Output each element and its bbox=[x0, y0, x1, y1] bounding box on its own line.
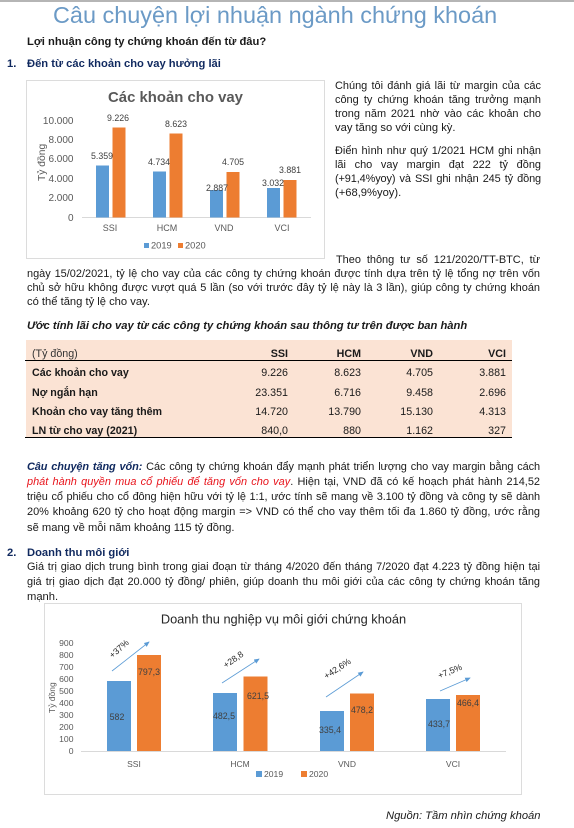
text block: brokerage revenue: Giá trị giao dịch trung bình trong giai đoạn từ tháng 4/2020 đến tháng 7/2020 đạt 4.223 tỷ đồng hiện tại bbox=[27, 561, 540, 573]
y axis labels: 700 bbox=[59, 662, 74, 672]
text block: circular 121: có thể tăng tỷ lệ cho vay. bbox=[27, 296, 150, 308]
y axis labels: 6.000 bbox=[48, 154, 74, 165]
text block: capital raising story: Câu chuyện tăng vốn: Các công ty chứng khoán đẩy mạnh phát triển lượng cho vay margin bằng cách bbox=[27, 461, 540, 473]
data labels: 797,3 bbox=[138, 667, 160, 677]
text block: brokerage revenue bbox=[27, 561, 540, 603]
text block: brokerage revenue: mạnh. bbox=[27, 591, 58, 603]
table header row: (Tỷ đồng) bbox=[32, 348, 78, 360]
data labels: 3.032 bbox=[262, 178, 284, 188]
row: additional loans: 14.720 bbox=[255, 406, 288, 418]
text block: capital raising story: 20% khoảng 620 tỷ cho hoạt động margin => VND có thể cho vay thêm tối đa 1.860 tỷ đồng, ước rằng bbox=[27, 506, 540, 518]
bars 2020 bbox=[137, 655, 480, 751]
text block: margin analysis: Điển hình như quý 1/2021 HCM ghi nhận bbox=[335, 145, 541, 157]
y axis labels: 500 bbox=[59, 686, 74, 696]
category labels bbox=[103, 223, 290, 233]
text block: capital raising story bbox=[26, 460, 540, 534]
row: profit from loans bbox=[32, 425, 506, 437]
table header row: VCI bbox=[488, 348, 506, 360]
heading: section 1: 1. bbox=[7, 58, 16, 70]
legend: 2020 bbox=[185, 240, 206, 250]
y axis labels: 8.000 bbox=[48, 135, 74, 146]
text block: margin analysis: trong năm 2021 nhờ vào các khoản cho bbox=[335, 108, 541, 120]
category labels: VND bbox=[214, 223, 234, 233]
growth arrows bbox=[112, 642, 470, 697]
data labels: 433,7 bbox=[428, 719, 450, 729]
category labels: VCI bbox=[446, 759, 460, 769]
row: profit from loans: 880 bbox=[343, 425, 361, 437]
data labels: 335,4 bbox=[319, 725, 341, 735]
text block: margin analysis: vay tăng so với cùng kỳ. bbox=[335, 122, 456, 134]
row: additional loans: Khoản cho vay tăng thêm bbox=[32, 406, 162, 418]
growth labels: +42,6% bbox=[322, 656, 353, 681]
text block: capital raising story: triệu cổ phiếu cho cổ đông hiện hữu với tỷ lệ 1:1, ước tính sẽ mang về 3.100 tỷ đồng và công ty sẽ dành bbox=[27, 490, 540, 502]
growth labels: +7,5% bbox=[436, 662, 464, 681]
row: short-term debt: 9.458 bbox=[406, 387, 433, 399]
data labels: 4.734 bbox=[148, 157, 170, 167]
row: short-term debt bbox=[32, 386, 506, 399]
data labels: 478,2 bbox=[351, 705, 373, 715]
y axis labels: 0 bbox=[69, 746, 74, 756]
y axis labels: 400 bbox=[59, 698, 74, 708]
legend: 2020 bbox=[309, 769, 328, 779]
legend bbox=[144, 240, 206, 250]
row: loans: Các khoản cho vay bbox=[32, 367, 129, 379]
data labels: 8.623 bbox=[165, 119, 187, 129]
y axis labels: 600 bbox=[59, 674, 74, 684]
source note: Nguồn: Tầm nhìn chứng khoán bbox=[386, 810, 540, 822]
y axis title: Tỷ đồng bbox=[36, 144, 48, 181]
y axis labels: 200 bbox=[59, 722, 74, 732]
table header row bbox=[32, 348, 506, 360]
y axis labels: 10.000 bbox=[43, 116, 74, 127]
table heading: Ước tính lãi cho vay từ các công ty chứng khoán sau thông tư trên được ban hành bbox=[27, 320, 467, 332]
row: loans: 4.705 bbox=[406, 367, 433, 379]
heading: section 2: Doanh thu môi giới bbox=[27, 547, 129, 559]
y axis labels: 0 bbox=[68, 213, 74, 224]
text block: circular 121 bbox=[27, 254, 540, 308]
table: loan interest estimates bbox=[26, 340, 512, 438]
title: Câu chuyện lợi nhuận ngành chứng khoán bbox=[53, 2, 497, 28]
data labels: 621,5 bbox=[247, 691, 269, 701]
subtitle question: Lợi nhuận công ty chứng khoán đến từ đâu? bbox=[27, 36, 266, 48]
category labels: SSI bbox=[103, 223, 117, 233]
chart: brokerage revenue bbox=[44, 603, 522, 795]
category labels: HCM bbox=[157, 223, 177, 233]
row: additional loans bbox=[32, 406, 506, 418]
growth labels: +37% bbox=[107, 637, 131, 660]
text block: circular 121: chủ sở hữu không được vượt quá 5 lần (so với trước đây tỷ lệ này là 3 lần), giúp công ty chứng khoán bbox=[27, 282, 540, 294]
row: additional loans: 13.790 bbox=[328, 406, 361, 418]
data labels: 4.705 bbox=[222, 157, 244, 167]
data labels: 3.881 bbox=[279, 165, 301, 175]
bars 2019 bbox=[96, 166, 280, 218]
heading: section 1: Đến từ các khoản cho vay hưởng lãi bbox=[27, 58, 221, 70]
data labels: 9.226 bbox=[107, 113, 129, 123]
y axis labels: 300 bbox=[59, 710, 74, 720]
growth labels bbox=[107, 637, 464, 681]
chart title: Doanh thu nghiệp vụ môi giới chứng khoán bbox=[161, 612, 406, 626]
y axis labels: 900 bbox=[59, 638, 74, 648]
legend: 2019 bbox=[151, 240, 172, 250]
data labels bbox=[110, 667, 479, 735]
legend bbox=[256, 769, 328, 779]
data labels: 5.359 bbox=[91, 151, 113, 161]
row: profit from loans: 327 bbox=[488, 425, 506, 437]
category labels: HCM bbox=[230, 759, 250, 769]
data labels: 2.887 bbox=[206, 183, 228, 193]
bars 2020 bbox=[112, 128, 296, 218]
legend: 2019 bbox=[264, 769, 283, 779]
growth labels: +28,8 bbox=[221, 649, 245, 670]
y axis title: Tỷ đồng bbox=[47, 682, 57, 713]
text block: circular 121: ngày 15/02/2021, tỷ lệ cho vay của các công ty chứng khoán được tính dựa trên tỷ lệ tổng nợ trên vốn bbox=[27, 268, 540, 280]
row: loans: 9.226 bbox=[261, 367, 288, 379]
row: short-term debt: 23.351 bbox=[255, 387, 288, 399]
table header row: HCM bbox=[337, 348, 361, 360]
table header row: SSI bbox=[271, 348, 288, 360]
text block: margin analysis: công ty chứng khoán tăng trưởng mạnh bbox=[335, 94, 541, 106]
y axis labels bbox=[43, 116, 74, 224]
text block: margin analysis bbox=[335, 80, 541, 199]
category labels: VCI bbox=[274, 223, 290, 233]
text block: margin analysis: (+68,9%yoy). bbox=[335, 187, 401, 199]
row: additional loans: 15.130 bbox=[400, 406, 433, 418]
data labels bbox=[91, 113, 301, 193]
y axis labels: 800 bbox=[59, 650, 74, 660]
text block: capital raising story: phát hành quyền mua cổ phiếu để tăng vốn cho vay. Hiện tại, VND đã có kế hoạch phát hành 214,52 bbox=[27, 476, 540, 488]
text block: capital raising story: sẽ mang về mỗi năm khoảng 115 tỷ đồng. bbox=[27, 522, 235, 534]
text block: brokerage revenue: giá trị giao dịch đạt 20.000 tỷ đồng/ phiên, giúp doanh thu môi giới của các công ty chứng khoán tăng bbox=[27, 576, 540, 588]
chart title: Các khoản cho vay bbox=[108, 90, 244, 106]
y axis labels: 2.000 bbox=[48, 193, 74, 204]
text block: margin analysis: Chúng tôi đánh giá lãi từ margin của các bbox=[335, 80, 541, 92]
row: short-term debt: Nợ ngắn hạn bbox=[32, 387, 98, 399]
category labels: VND bbox=[338, 759, 356, 769]
row: loans: 8.623 bbox=[334, 367, 361, 379]
text block: circular 121: Theo thông tư số 121/2020/TT-BTC, từ bbox=[336, 254, 540, 266]
row: short-term debt: 6.716 bbox=[334, 387, 361, 399]
y axis labels bbox=[59, 638, 74, 756]
text block: margin analysis: (+91,4%yoy) và SSI ghi nhận 245 tỷ đồng bbox=[335, 173, 541, 185]
heading: section 2: 2. bbox=[7, 547, 16, 559]
data labels: 482,5 bbox=[213, 711, 235, 721]
category labels bbox=[127, 759, 460, 769]
row: profit from loans: 1.162 bbox=[406, 425, 433, 437]
text block: margin analysis: lãi cho vay margin đạt 222 tỷ đồng bbox=[335, 159, 541, 171]
chart: loans bar chart bbox=[26, 80, 325, 259]
row: additional loans: 4.313 bbox=[479, 406, 506, 418]
bars 2019 bbox=[107, 681, 450, 751]
table header row: VND bbox=[410, 348, 433, 360]
row: profit from loans: LN từ cho vay (2021) bbox=[32, 425, 137, 437]
category labels: SSI bbox=[127, 759, 141, 769]
row: short-term debt: 2.696 bbox=[479, 387, 506, 399]
row: loans: 3.881 bbox=[479, 367, 506, 379]
data labels: 582 bbox=[110, 712, 124, 722]
y axis labels: 4.000 bbox=[48, 174, 74, 185]
row: loans bbox=[32, 367, 506, 379]
y axis labels: 100 bbox=[59, 734, 74, 744]
row: profit from loans: 840,0 bbox=[261, 425, 288, 437]
data labels: 466,4 bbox=[457, 698, 479, 708]
